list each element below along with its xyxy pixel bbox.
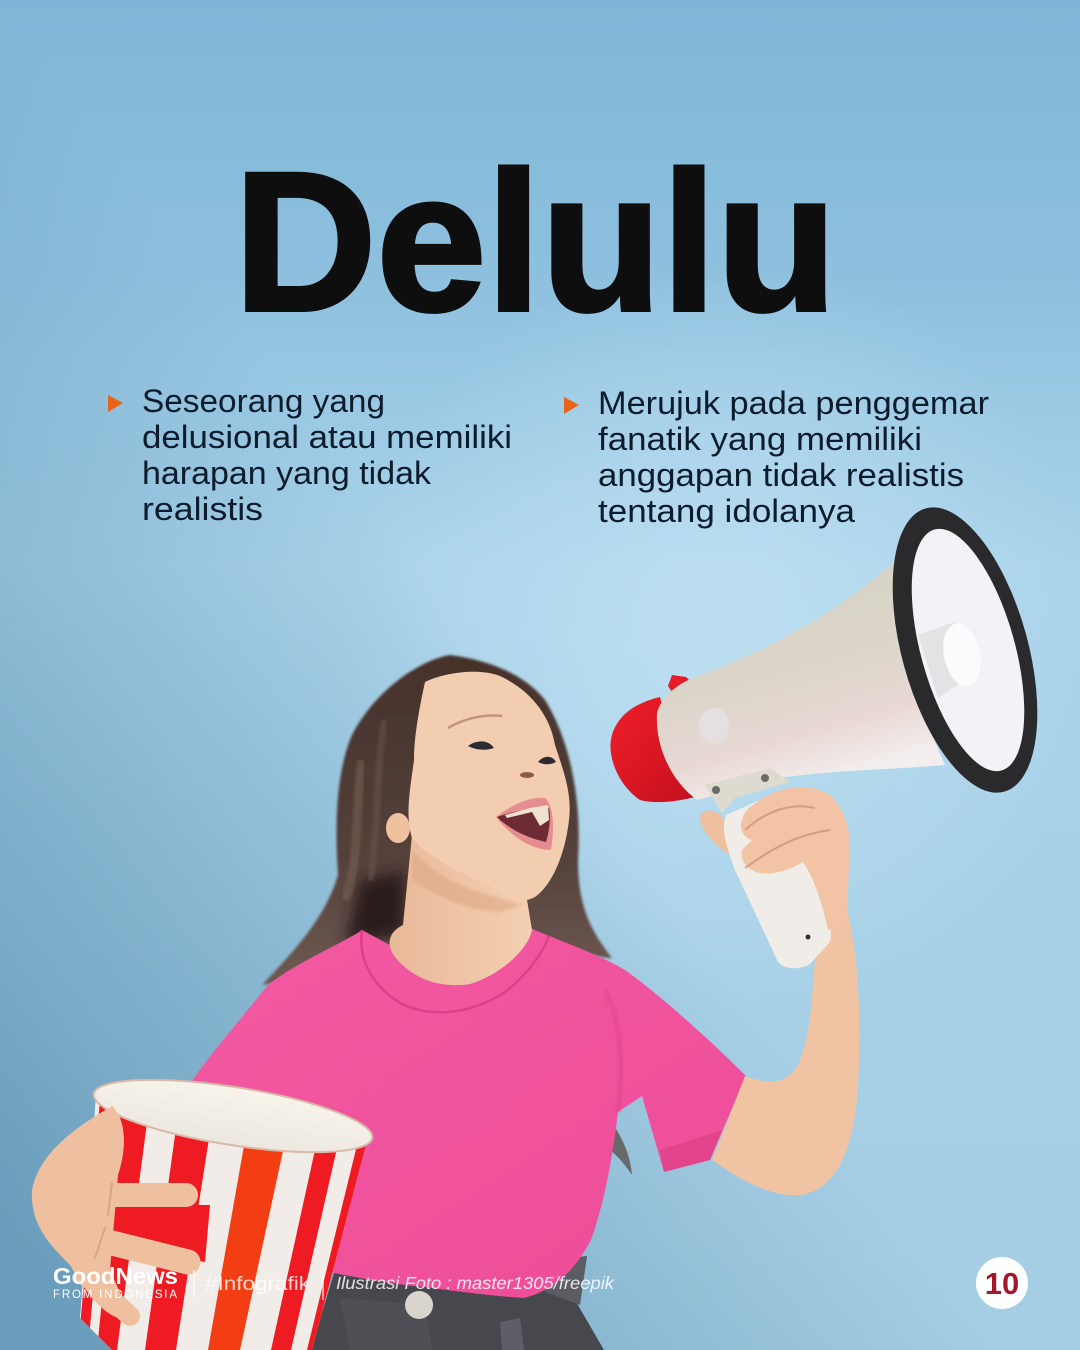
mouth bbox=[496, 798, 553, 850]
bullet text: left column bbox=[108, 383, 512, 527]
page number bbox=[976, 1257, 1028, 1309]
ear bbox=[386, 813, 410, 843]
bracket bbox=[705, 768, 790, 813]
thumb bbox=[700, 811, 735, 858]
definition text right bbox=[598, 385, 989, 529]
icon: orange bullet left bbox=[108, 395, 123, 412]
right arm bbox=[692, 905, 860, 1195]
definition text right: tentang idolanya bbox=[598, 493, 855, 529]
definition text left: delusional atau memiliki bbox=[142, 419, 512, 455]
bullet text: right column bbox=[564, 385, 989, 529]
megaphone horn bbox=[657, 563, 945, 800]
definition text right: anggapan tidak realistis bbox=[598, 457, 964, 493]
icon: orange bullet right bbox=[564, 397, 579, 414]
logo bbox=[53, 1263, 178, 1301]
logo: GoodNews bbox=[53, 1263, 178, 1289]
definition text left: realistis bbox=[142, 491, 263, 527]
right hand bbox=[700, 787, 850, 968]
chin shade bbox=[412, 850, 522, 912]
jeans bbox=[310, 1256, 604, 1350]
speaker dot bbox=[699, 708, 729, 744]
eyes and brows bbox=[448, 716, 556, 764]
speaker plug bbox=[918, 620, 986, 698]
bucket stripes bbox=[78, 1100, 380, 1350]
footer bbox=[53, 1257, 1028, 1309]
photo credit: Ilustrasi Foto : master1305/freepik bbox=[336, 1273, 615, 1293]
page number: 10 bbox=[985, 1266, 1019, 1301]
definition text left bbox=[142, 383, 512, 527]
photo: girl with megaphone and popcorn bbox=[32, 492, 1065, 1350]
title: Delulu bbox=[234, 131, 837, 352]
bucket body bbox=[80, 1095, 366, 1350]
bucket rim bbox=[89, 1065, 377, 1167]
face bbox=[408, 672, 570, 900]
hair bbox=[262, 655, 612, 985]
megaphone inner cone bbox=[889, 517, 1047, 783]
definition text right: fanatik yang memiliki bbox=[598, 421, 922, 457]
definition text right: Merujuk pada penggemar bbox=[598, 385, 989, 421]
megaphone bbox=[610, 492, 1065, 813]
definition text left: harapan yang tidak bbox=[142, 455, 432, 491]
neck bbox=[390, 835, 532, 985]
screws bbox=[712, 774, 769, 794]
hashtag: #Infografik bbox=[205, 1274, 311, 1295]
megaphone red back bbox=[610, 697, 695, 802]
logo: FROM INDONESIA bbox=[53, 1289, 177, 1301]
shirt bbox=[186, 928, 746, 1298]
popcorn bucket bbox=[78, 1065, 380, 1350]
megaphone handle bbox=[724, 800, 831, 968]
fingers bbox=[741, 787, 850, 930]
definition text left: Seseorang yang bbox=[142, 383, 385, 419]
left hand bbox=[32, 1106, 188, 1320]
megaphone rim bbox=[865, 492, 1065, 808]
hair strands behind shirt bbox=[602, 1115, 632, 1175]
megaphone red switch bbox=[668, 675, 692, 692]
nose bbox=[520, 772, 534, 778]
